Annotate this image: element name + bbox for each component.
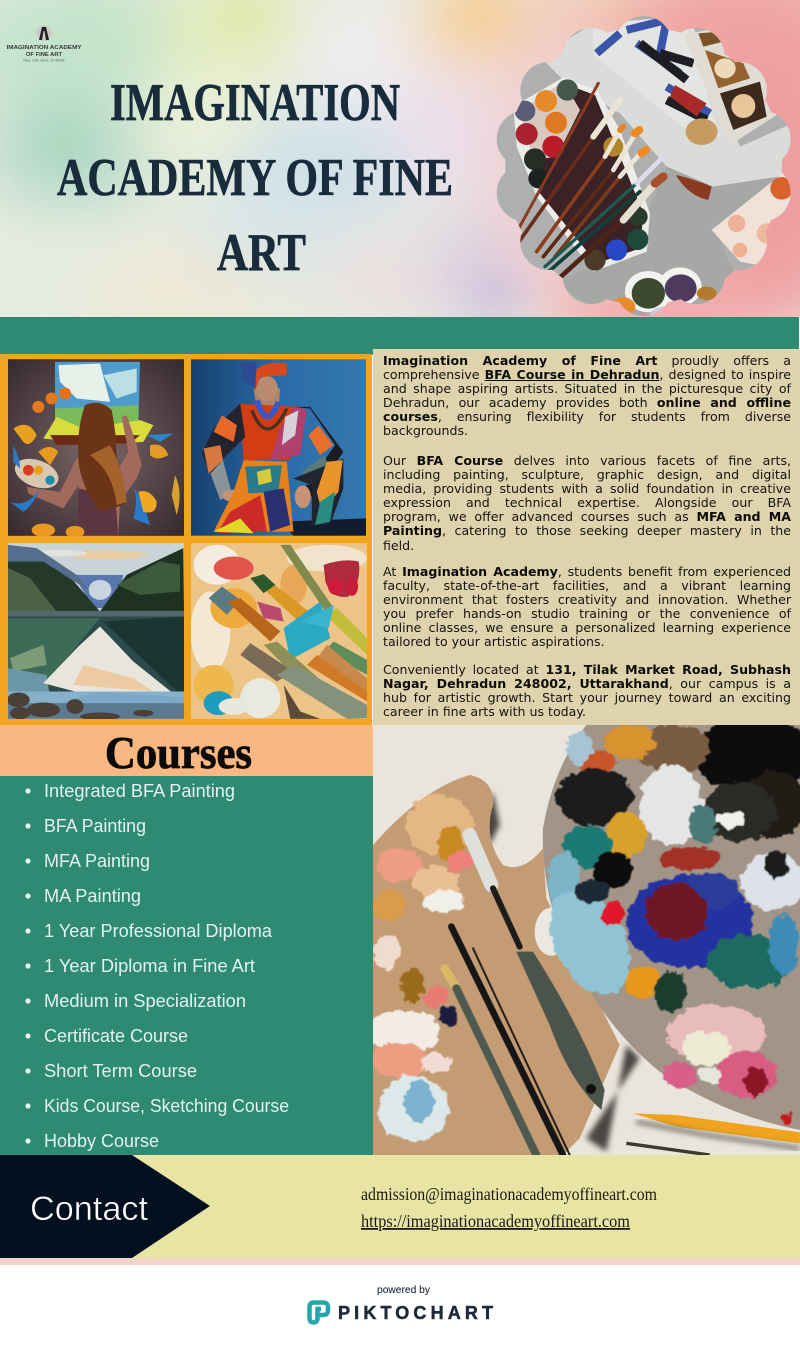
text block: paragraph 4: hub for artistic growth. Start your journey toward an exciting <box>383 690 791 705</box>
panel: courses list: BFA Painting <box>44 816 146 836</box>
text block: paragraph 2: expression and technical expertise. Alongside our BFA <box>383 495 791 510</box>
text block: paragraph 2: field. <box>383 538 414 553</box>
arrow: contact label <box>0 1155 210 1258</box>
logo: IMAGINATION ACADEMY <box>6 45 82 51</box>
panel: courses list: Medium in Specialization <box>44 991 246 1011</box>
text block: paragraph 3: you prefer hands-on studio training or the convenience of <box>383 606 791 621</box>
text block: paragraph 3: online classes, we ensure a personalized learning experience <box>383 620 791 635</box>
text block: paragraph 1: comprehensive BFA Course in Dehradun, designed to inspire <box>383 367 791 382</box>
text block: paragraph 1: backgrounds. <box>383 423 468 438</box>
green band <box>0 317 799 355</box>
text block: paragraph 2 <box>383 453 791 553</box>
text block: paragraph 2: Painting, catering to those seeking deeper mastery in the <box>383 523 791 538</box>
panel: courses list: Certificate Course <box>44 1026 188 1046</box>
panel: description text background <box>373 349 800 725</box>
text block: paragraph 4 <box>383 662 791 719</box>
text block: paragraph 4: Conveniently located at 131, Tilak Market Road, Subhash <box>383 662 791 677</box>
text block: paragraph 2: Our BFA Course delves into various facets of fine arts, <box>383 453 791 468</box>
text block: paragraph 2: including painting, sculpture, graphic design, and digital <box>383 467 791 482</box>
panel: courses list: Hobby Course <box>44 1131 159 1151</box>
panel: courses list: Kids Course, Sketching Course <box>44 1096 289 1116</box>
text block: paragraph 2: program, we offer advanced courses such as MFA and MA <box>383 509 791 524</box>
panel: courses list: 1 Year Professional Diploma <box>44 921 273 941</box>
image: artist palettes with thick paint <box>373 725 800 1155</box>
contact details: https://imaginationacademyoffineart.com <box>361 1211 630 1231</box>
text block: paragraph 1: courses, ensuring flexibility for students from diverse <box>383 409 791 424</box>
text block: paragraph 1: Dehradun, our academy provides both online and offline <box>383 395 791 410</box>
image: girl painting <box>8 359 184 536</box>
text block: paragraph 1 <box>383 353 792 438</box>
contact band <box>0 1155 800 1258</box>
hero watercolor background <box>0 0 800 317</box>
logo <box>6 25 82 62</box>
text block: paragraph 4: Nagar, Dehradun 248002, Uttarakhand, our campus is a <box>383 676 791 691</box>
powered by Piktochart: PIKTOCHART <box>338 1303 493 1323</box>
title: ART <box>217 224 306 282</box>
text block: paragraph 3: environment that fosters creativity and innovation. Whether <box>383 592 791 607</box>
image: woman portrait in colourful dress <box>191 359 366 536</box>
image: paint brushes on palette <box>191 543 367 719</box>
panel: courses list <box>0 776 373 1155</box>
panel: courses list: 1 Year Diploma in Fine Art <box>44 956 255 976</box>
pink stripe <box>0 1258 800 1265</box>
panel: orange image grid <box>0 354 372 725</box>
text block: paragraph 1: and shape aspiring artists. Situated in the picturesque city of <box>383 381 791 396</box>
panel: courses list: MFA Painting <box>44 851 150 871</box>
logo: OF FINE ART <box>26 52 63 58</box>
hero photo: paint palette and brushes in scalloped frame <box>496 16 791 316</box>
text block: paragraph 3: At Imagination Academy, students benefit from experienced <box>383 564 791 579</box>
arrow: contact label: Contact <box>30 1190 149 1228</box>
image: mountain lake painting <box>8 543 184 719</box>
panel: courses list: MA Painting <box>44 886 141 906</box>
text block: paragraph 3: faculty, state-of-the-art facilities, and a vibrant learning <box>383 578 791 593</box>
text block: paragraph 4: career in fine arts with us today. <box>383 704 586 719</box>
text block: paragraph 1: Imagination Academy of Fine Art proudly offers a <box>383 353 791 368</box>
powered by Piktochart: powered by <box>377 1284 431 1296</box>
title <box>57 74 453 282</box>
heading: Courses <box>0 725 373 776</box>
text block: paragraph 3: tailored to your artistic aspirations. <box>383 634 605 649</box>
panel: courses list: Short Term Course <box>44 1061 197 1081</box>
panel: courses list: Integrated BFA Painting <box>44 781 235 801</box>
text block: paragraph 2: media, providing students with a solid foundation in creative <box>383 481 791 496</box>
contact details <box>361 1184 657 1231</box>
powered by Piktochart <box>307 1284 494 1325</box>
text block: paragraph 3 <box>383 564 792 649</box>
